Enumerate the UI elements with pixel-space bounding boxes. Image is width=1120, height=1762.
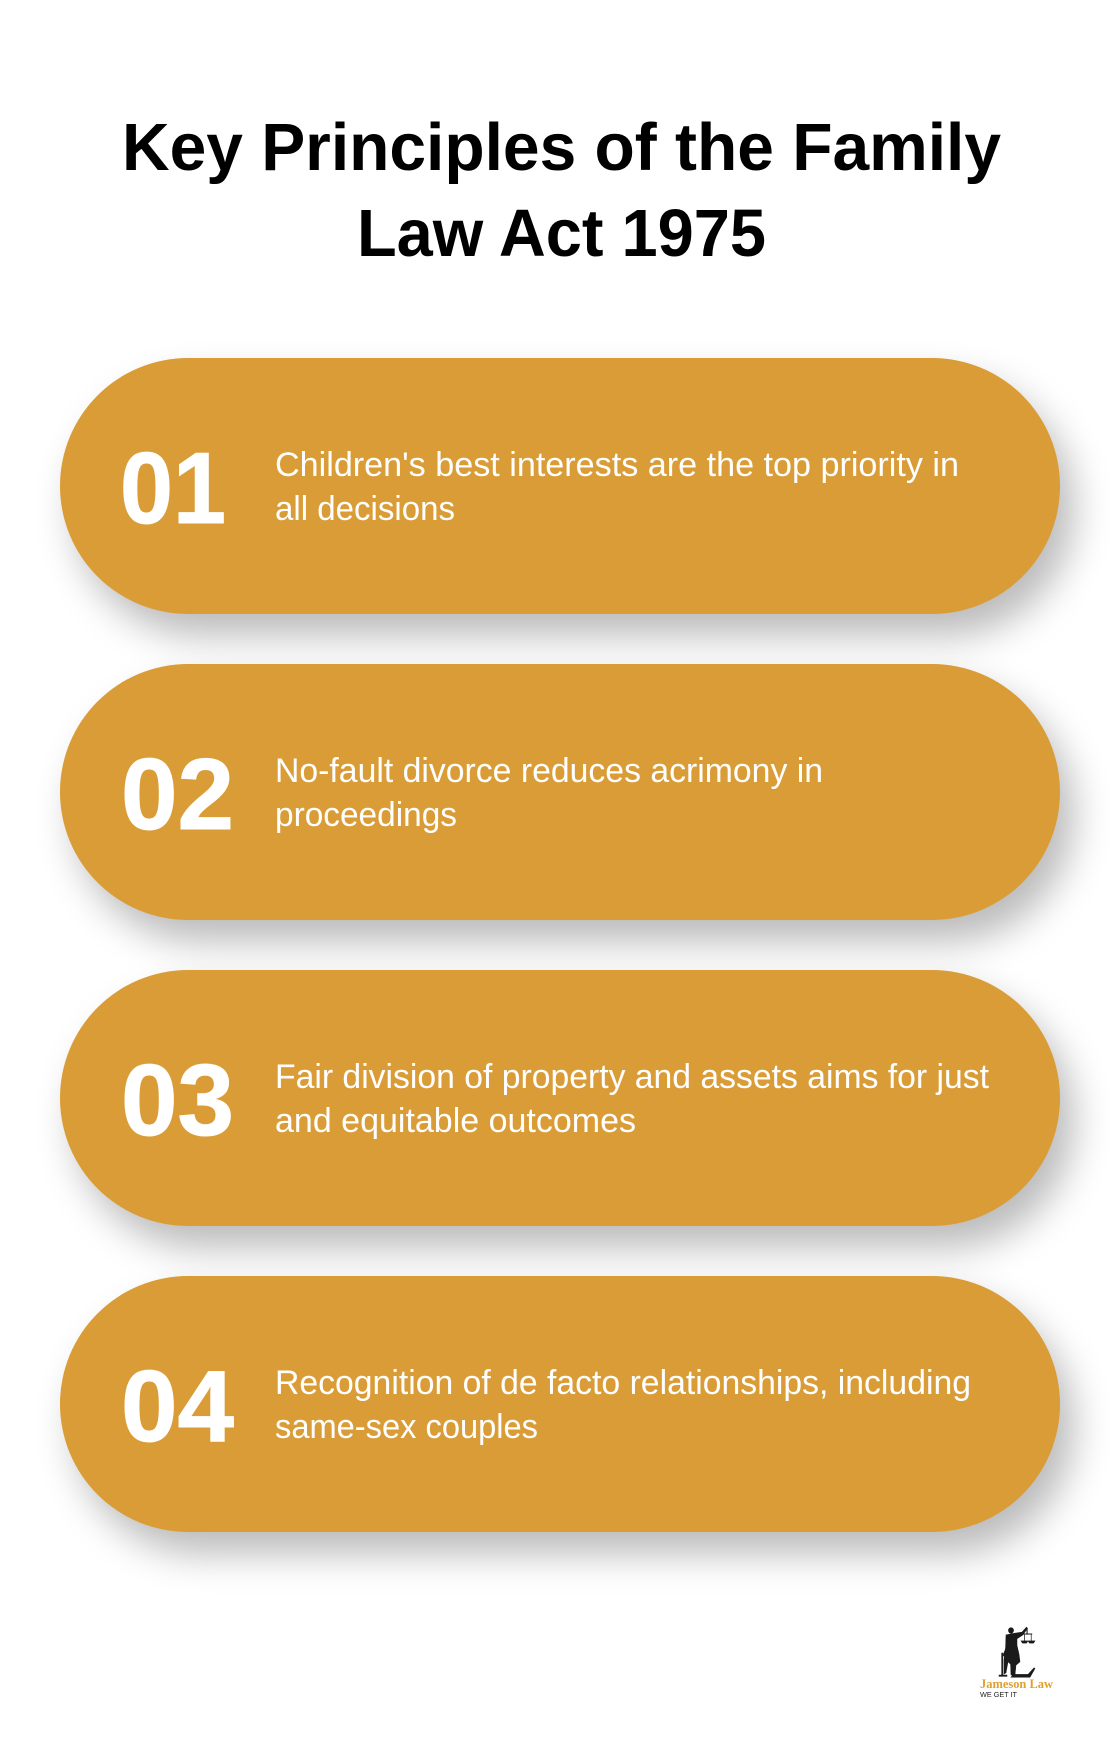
number 02: 02 [121, 739, 234, 851]
text: principle 03: and equitable outcomes [275, 1102, 636, 1140]
text: principle 02: No-fault divorce reduces acrimony in [275, 752, 823, 790]
logo tagline: WE GET IT [980, 1690, 1017, 1699]
text: principle 02 [275, 752, 823, 834]
title: Key Principles of the Family [122, 110, 1001, 185]
panel: principle 03 [60, 970, 1060, 1226]
panel: principle 01 [60, 358, 1060, 614]
text: principle 04 [275, 1364, 971, 1446]
logo name: Jameson Law [980, 1677, 1053, 1691]
title: Law Act 1975 [357, 196, 766, 271]
text: principle 01: all decisions [275, 490, 455, 528]
number 01: 01 [120, 433, 226, 545]
text: principle 02: proceedings [275, 796, 457, 834]
number 03: 03 [121, 1045, 234, 1157]
panel: principle 04 [60, 1276, 1060, 1532]
title [122, 110, 1001, 271]
number 04: 04 [121, 1351, 234, 1463]
text: principle 03 [275, 1058, 990, 1140]
text: principle 01: Children's best interests are the top priority in [275, 446, 959, 484]
panel: principle 02 [60, 664, 1060, 920]
text: principle 01 [275, 446, 959, 528]
icon: lady justice [999, 1627, 1035, 1677]
logo: Jameson Law [980, 1626, 1053, 1699]
text: principle 04: same-sex couples [275, 1408, 538, 1446]
text: principle 03: Fair division of property and assets aims for just [275, 1058, 990, 1096]
text: principle 04: Recognition of de facto relationships, including [275, 1364, 971, 1402]
